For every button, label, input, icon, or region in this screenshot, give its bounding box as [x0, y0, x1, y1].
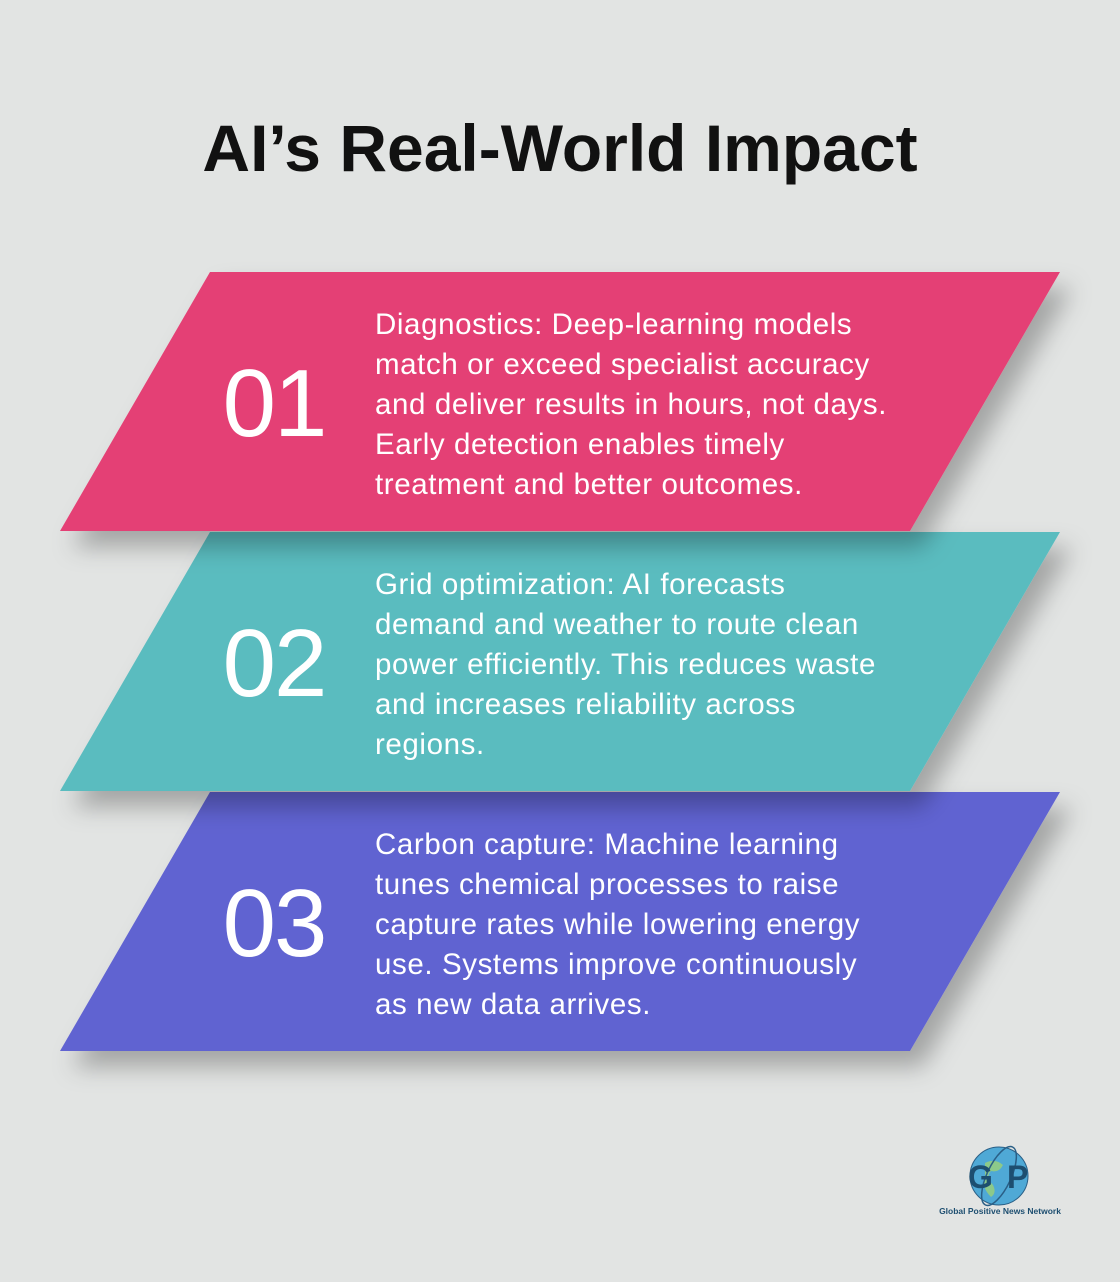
panel 1 text: Diagnostics: Deep-learning models: [375, 308, 852, 341]
logo: G: [968, 1159, 993, 1195]
panel 1 text: match or exceed specialist accuracy: [375, 348, 870, 381]
panel 2 number: 02: [223, 610, 325, 717]
panel 2 text: and increases reliability across: [375, 688, 796, 721]
logo: P: [1007, 1159, 1028, 1195]
panel 2 text: power efficiently. This reduces waste: [375, 648, 876, 681]
panel 3 text: use. Systems improve continuously: [375, 948, 857, 981]
panel 2 text: [375, 568, 876, 761]
panel 2 text: Grid optimization: AI forecasts: [375, 568, 785, 601]
panel 1 text: and deliver results in hours, not days.: [375, 388, 887, 421]
panel 1 number: 01: [223, 350, 325, 457]
logo: Global Positive News Network: [939, 1206, 1061, 1216]
panel 3 shape: [60, 792, 1060, 1051]
panel 2 text: regions.: [375, 728, 485, 761]
panel 3 text: as new data arrives.: [375, 988, 651, 1021]
panel 1 text: [375, 308, 887, 501]
panel 3 number: 03: [223, 870, 325, 977]
panel 1 shape: [60, 272, 1060, 531]
panel 3 text: Carbon capture: Machine learning: [375, 828, 839, 861]
panel 1 text: treatment and better outcomes.: [375, 468, 803, 501]
panel 3 text: tunes chemical processes to raise: [375, 868, 839, 901]
panel 1 text: Early detection enables timely: [375, 428, 785, 461]
panel 3 text: capture rates while lowering energy: [375, 908, 860, 941]
logo: [939, 1146, 1061, 1216]
panel 3 text: [375, 828, 860, 1021]
title: AI’s Real-World Impact: [202, 111, 918, 185]
panel 2 text: demand and weather to route clean: [375, 608, 859, 641]
panel 2 shape: [60, 532, 1060, 791]
